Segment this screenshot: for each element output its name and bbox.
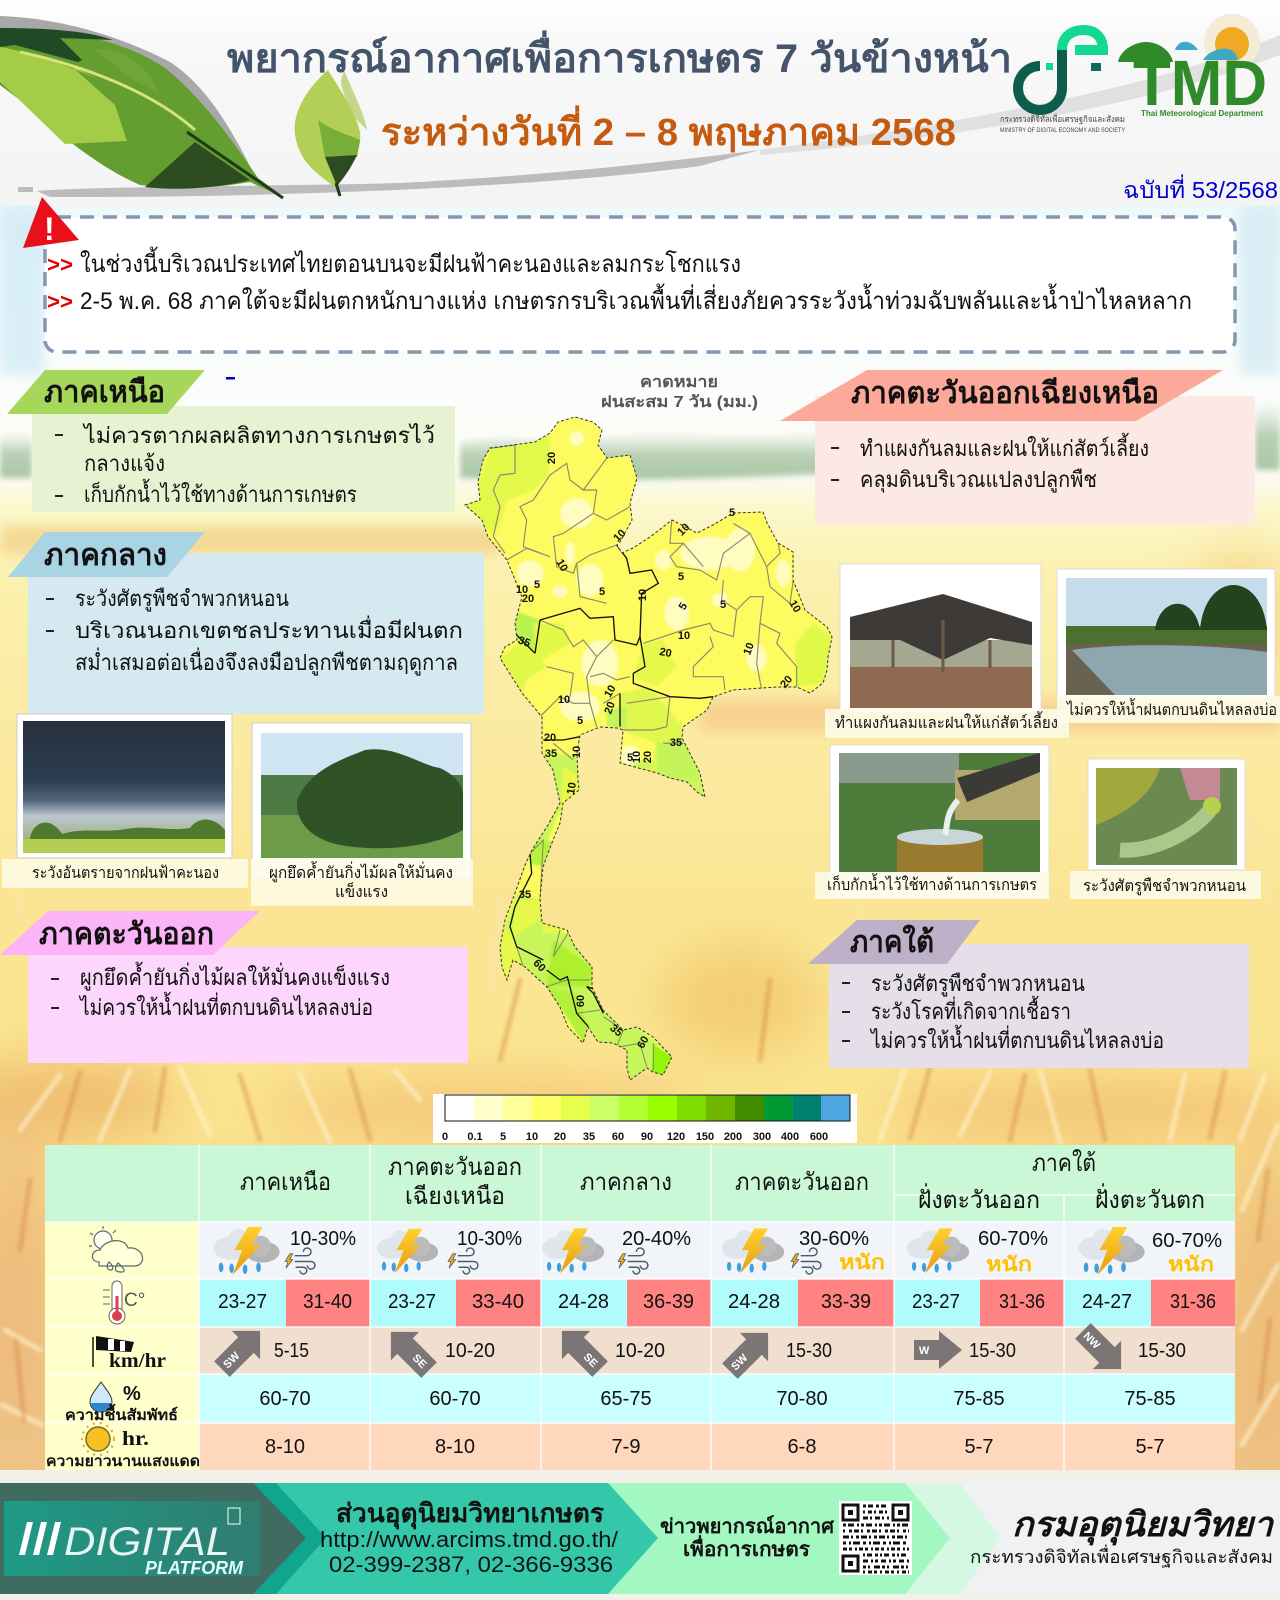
map contour labels: 60 bbox=[635, 1034, 652, 1051]
TMD name: กรมอุตุนิยมวิทยา bbox=[1012, 1506, 1275, 1546]
panel: northeast bbox=[780, 370, 1255, 525]
map contour labels bbox=[516, 452, 803, 1051]
sunshine row: 8-10 bbox=[265, 1436, 305, 1458]
colour legend: 400 bbox=[781, 1131, 799, 1143]
logo: ministry DE: กระทรวงดิจิทัลเพื่อเศรษฐกิจและสังคม bbox=[1000, 113, 1125, 125]
panel: east bbox=[0, 911, 468, 1063]
row label: relative humidity: % bbox=[123, 1383, 141, 1405]
rainfall map of Thailand bbox=[460, 410, 840, 1090]
table headers: ฝั่งตะวันออก bbox=[918, 1183, 1040, 1214]
row icon: wind sock: km/hr bbox=[109, 1350, 166, 1372]
wind row: 10-20 bbox=[615, 1340, 665, 1362]
digital platform badge bbox=[4, 1501, 260, 1578]
south advice bbox=[842, 971, 1164, 1053]
edition number: ฉบับที่ 53/2568 bbox=[1123, 174, 1278, 203]
rain and storm row: 20-40% bbox=[622, 1228, 691, 1250]
decorative region borders bbox=[515, 545, 713, 740]
temperature row: 33-39 bbox=[821, 1291, 871, 1313]
map contour labels: 5 bbox=[729, 507, 735, 519]
temperature row: 33-40 bbox=[472, 1291, 524, 1313]
alert line 1: ในช่วงนี้บริเวณประเทศไทยตอนบนจะมีฝนฟ้าคะนองและลมกระโชกแรง bbox=[80, 246, 741, 278]
map contour labels: 20 bbox=[778, 674, 795, 691]
photo: propped fruit tree bbox=[251, 723, 473, 906]
temperature row: 24-28 bbox=[728, 1291, 780, 1313]
icon: large leaf bbox=[0, 16, 285, 198]
colour legend: 0.1 bbox=[467, 1131, 483, 1143]
caption bbox=[815, 872, 1049, 899]
humidity row: 60-70 bbox=[429, 1388, 481, 1410]
sunshine row: 5-7 bbox=[1136, 1436, 1164, 1458]
forecast news label: เพื่อการเกษตร bbox=[683, 1534, 810, 1561]
colour legend: 20 bbox=[554, 1131, 566, 1143]
sunshine row: 5-7 bbox=[965, 1436, 993, 1458]
colour legend: 300 bbox=[753, 1131, 771, 1143]
east advice: ไม่ควรให้น้ำฝนที่ตกบนดินไหลลงบ่อ bbox=[78, 992, 373, 1020]
south advice: ไม่ควรให้น้ำฝนที่ตกบนดินไหลลงบ่อ bbox=[869, 1025, 1164, 1053]
map contour labels: 60 bbox=[531, 957, 548, 974]
map contour labels: 35 bbox=[607, 1022, 624, 1039]
northeast advice: คลุมดินบริเวณแปลงปลูกพืช bbox=[860, 467, 1097, 493]
map contour labels: 10 bbox=[611, 527, 628, 544]
rain and storm row: 10-30% bbox=[457, 1228, 522, 1250]
wind row: 15-30 bbox=[1138, 1340, 1186, 1362]
arrow: SW bbox=[208, 1317, 274, 1383]
caption bbox=[2, 859, 248, 888]
east advice: ผูกยึดค้ำยันกิ่งไม้ผลให้มั่นคงแข็งแรง bbox=[80, 962, 390, 991]
caption: ทำแผงกันลมและฝนให้แก่สัตว์เลี้ยง bbox=[835, 711, 1058, 732]
central advice bbox=[46, 586, 463, 676]
temperature row: 23-27 bbox=[218, 1291, 267, 1313]
photo: caterpillar bbox=[1070, 759, 1261, 899]
map legend title: คาดหมาย bbox=[640, 374, 718, 391]
table headers: ภาคเหนือ bbox=[240, 1169, 331, 1196]
temperature row: 24-27 bbox=[1082, 1291, 1132, 1313]
caption bbox=[251, 859, 473, 906]
row icon: thermometer: C° bbox=[124, 1290, 145, 1311]
central advice: สม่ำเสมอต่อเนื่องจึงลงมือปลูกพืชตามฤดูกาล bbox=[75, 647, 458, 676]
decorative wheat streaks bbox=[2, 820, 1278, 1445]
alert line 1: >> bbox=[47, 252, 73, 277]
temperature row: 36-39 bbox=[643, 1291, 694, 1313]
arrow: SW: SW bbox=[729, 1352, 751, 1373]
table headers: ภาคใต้ bbox=[1032, 1149, 1096, 1177]
decorative swoosh bbox=[760, 35, 1280, 155]
row label: relative humidity bbox=[65, 1382, 178, 1424]
division contact: ส่วนอุตุนิยมวิทยาเกษตร bbox=[336, 1498, 604, 1530]
temperature row: 31-40 bbox=[303, 1291, 352, 1313]
logo: TMD: Thai Meteorological Department bbox=[1141, 109, 1263, 118]
forecast news label bbox=[660, 1515, 835, 1561]
map contour labels: 10 bbox=[741, 641, 757, 657]
wind row: 10-20 bbox=[445, 1340, 495, 1362]
heading: south bbox=[808, 920, 980, 964]
TMD name: กระทรวงดิจิทัลเพื่อเศรษฐกิจและสังคม bbox=[970, 1544, 1273, 1568]
map contour labels: 10 bbox=[516, 584, 528, 596]
row label: sunshine duration: hr. bbox=[122, 1428, 149, 1450]
rain and storm row bbox=[213, 1227, 1222, 1276]
colour legend: 0 bbox=[442, 1131, 448, 1143]
heading: central: ภาคกลาง bbox=[44, 539, 167, 572]
map contour labels: 35 bbox=[545, 748, 557, 760]
icon: warning triangle: ! bbox=[44, 211, 55, 247]
map contour labels: 35 bbox=[516, 634, 532, 650]
rain and storm row: หนัก bbox=[986, 1254, 1032, 1276]
heading: north bbox=[7, 370, 205, 414]
map contour labels: 10 bbox=[675, 521, 692, 538]
north advice: ไม่ควรตากผลผลิตทางการเกษตรไว้ bbox=[82, 423, 435, 448]
humidity row: 60-70 bbox=[259, 1388, 311, 1410]
table headers bbox=[240, 1149, 1205, 1214]
temperature row: 23-27 bbox=[912, 1291, 960, 1313]
logo: TMD: TMD bbox=[1133, 47, 1267, 119]
table headers: ภาคตะวันออก bbox=[388, 1154, 522, 1181]
icon: small leaf bbox=[295, 70, 367, 196]
decorative table grid bbox=[45, 1145, 1235, 1470]
central advice: บริเวณนอกเขตชลประทานเมื่อมีฝนตก bbox=[75, 615, 463, 643]
logo: ministry DE: MINISTRY OF DIGITAL ECONOMY AND SOCIETY bbox=[1000, 127, 1126, 134]
map contour labels: 5 bbox=[677, 601, 690, 612]
map contour labels: 5 bbox=[534, 579, 540, 591]
arrow: SE bbox=[377, 1318, 443, 1384]
rain and storm row: 60-70% bbox=[978, 1228, 1048, 1250]
division contact: http://www.arcims.tmd.go.th/ bbox=[320, 1527, 619, 1552]
colour legend: 90 bbox=[641, 1131, 653, 1143]
colour legend: 10 bbox=[526, 1131, 538, 1143]
wind row: 15-30 bbox=[786, 1340, 832, 1362]
heading: central bbox=[8, 532, 205, 577]
heading: northeast bbox=[780, 370, 1223, 421]
map contour labels: 10 bbox=[678, 630, 690, 642]
map contour labels: 35 bbox=[519, 889, 531, 901]
table headers: ภาคตะวันออก bbox=[735, 1169, 869, 1196]
north advice: เก็บกักน้ำไว้ใช้ทางด้านการเกษตร bbox=[84, 479, 357, 507]
table headers: เฉียงเหนือ bbox=[405, 1183, 505, 1210]
caption: ระวังศัตรูพืชจำพวกหนอน bbox=[1083, 877, 1246, 896]
decorative province lines bbox=[517, 840, 653, 1070]
map contour labels: 35 bbox=[670, 737, 682, 749]
caption: ผูกยึดค้ำยันกิ่งไม้ผลให้มั่นคง bbox=[269, 861, 453, 883]
table headers: ฝั่งตะวันตก bbox=[1095, 1183, 1205, 1214]
map contour labels: 20 bbox=[602, 700, 618, 716]
rain and storm row: 60-70% bbox=[1152, 1230, 1222, 1252]
photo: livestock shelter bbox=[825, 564, 1069, 738]
map contour labels: 10 bbox=[602, 683, 619, 700]
map contour labels: 5 bbox=[678, 571, 684, 583]
northeast advice bbox=[831, 433, 1149, 493]
rain and storm row: 30-60% bbox=[799, 1228, 869, 1250]
map contour labels: 10 bbox=[631, 751, 643, 763]
row icon: thermometer bbox=[103, 1281, 145, 1324]
forecast table bbox=[45, 1145, 1235, 1470]
wind row bbox=[208, 1317, 1186, 1385]
row label: sunshine duration bbox=[46, 1423, 200, 1470]
row icon: weather bbox=[89, 1226, 143, 1272]
humidity row bbox=[259, 1388, 1176, 1410]
temperature row bbox=[218, 1291, 1216, 1313]
colour legend: 35 bbox=[583, 1131, 595, 1143]
panel: north bbox=[7, 370, 455, 512]
row icon: wind sock bbox=[93, 1336, 166, 1372]
footer band bbox=[0, 1470, 1280, 1600]
arrow: SE: SE bbox=[410, 1352, 429, 1371]
title: พยากรณ์อากาศเพื่อการเกษตร 7 วันข้างหน้า bbox=[227, 30, 1012, 81]
north advice: กลางแจ้ง bbox=[84, 451, 165, 476]
heading: east: ภาคตะวันออก bbox=[39, 918, 214, 951]
map contour labels: 10 bbox=[565, 781, 579, 796]
division contact bbox=[320, 1498, 619, 1577]
row label: relative humidity: ความชื้นสัมพัทธ์ bbox=[65, 1403, 178, 1424]
map contour labels: 20 bbox=[642, 751, 654, 763]
temperature row: 31-36 bbox=[1170, 1291, 1216, 1313]
caption: ระวังอันตรายจากฝนฟ้าคะนอง bbox=[32, 864, 219, 882]
map contour labels: 10 bbox=[553, 557, 570, 574]
wind row: 15-30 bbox=[969, 1340, 1016, 1362]
map contour labels: 20 bbox=[522, 593, 534, 605]
map contour labels: 20 bbox=[546, 452, 558, 464]
arrow: NW: NW bbox=[1081, 1330, 1103, 1352]
map legend title: ฝนสะสม 7 วัน (มม.) bbox=[601, 393, 758, 411]
TMD name bbox=[970, 1506, 1275, 1568]
map contour labels: 5 bbox=[577, 715, 583, 727]
stray blue dash bbox=[226, 377, 235, 380]
rain and storm row: 10-30% bbox=[290, 1228, 356, 1250]
photo: rain water barrel bbox=[815, 745, 1049, 899]
arrow: NW bbox=[1069, 1317, 1135, 1383]
digital platform badge: PLATFORM bbox=[145, 1558, 244, 1578]
south advice: ระวังศัตรูพืชจำพวกหนอน bbox=[871, 971, 1085, 997]
temperature row: 24-28 bbox=[558, 1291, 609, 1313]
caption bbox=[1057, 696, 1280, 723]
table cell backgrounds bbox=[45, 1145, 1235, 1470]
photo: storm clouds bbox=[2, 714, 248, 888]
forecast news label: ข่าวพยากรณ์อากาศ bbox=[660, 1515, 835, 1538]
map contour labels: 10 bbox=[637, 589, 649, 601]
south advice: ระวังโรคที่เกิดจากเชื้อรา bbox=[871, 996, 1071, 1024]
division contact: 02-399-2387, 02-366-9336 bbox=[329, 1552, 613, 1577]
map contour labels: 5 bbox=[627, 752, 633, 764]
heading: east bbox=[0, 911, 260, 955]
temperature row: 31-36 bbox=[999, 1291, 1045, 1313]
map contour labels: 5 bbox=[599, 586, 605, 598]
logo: TMD bbox=[1118, 14, 1267, 119]
rain and storm row: หนัก bbox=[839, 1252, 885, 1274]
humidity row: 75-85 bbox=[1124, 1388, 1176, 1410]
panel: central bbox=[8, 532, 484, 714]
map contour labels: 10 bbox=[786, 598, 803, 615]
map legend title bbox=[601, 374, 758, 411]
sunshine row: 6-8 bbox=[788, 1436, 816, 1458]
date subtitle: ระหว่างวันที่ 2 – 8 พฤษภาคม 2568 bbox=[381, 105, 956, 154]
alert line 2: >> bbox=[47, 289, 73, 314]
map contour labels: 20 bbox=[544, 732, 556, 744]
arrow: SW: SW bbox=[221, 1350, 243, 1371]
alert line 2: 2-5 พ.ค. 68 ภาคใต้จะมีฝนตกหนักบางแห่ง เกษตรกรบริเวณพื้นที่เสี่ยงภัยควรระวังน้ำท่วมฉับพลันและน้ำป่าไหลหลาก bbox=[80, 283, 1192, 315]
arrow: W: W bbox=[919, 1345, 930, 1357]
decorative province lines bbox=[490, 445, 797, 760]
map contour labels: 10 bbox=[571, 746, 583, 758]
caption: แข็งแรง bbox=[335, 881, 388, 901]
panel: south bbox=[808, 920, 1249, 1068]
central advice: ระวังศัตรูพืชจำพวกหนอน bbox=[75, 586, 289, 612]
arrow: SW bbox=[716, 1319, 782, 1385]
colour legend: 200 bbox=[724, 1131, 742, 1143]
decorative region borders bbox=[510, 853, 603, 1027]
wind row: 5-15 bbox=[274, 1340, 309, 1362]
sunshine row: 7-9 bbox=[612, 1436, 640, 1458]
arrow: SE bbox=[548, 1317, 614, 1383]
caption: เก็บกักน้ำไว้ใช้ทางด้านการเกษตร bbox=[827, 873, 1037, 894]
colour legend: 60 bbox=[612, 1131, 624, 1143]
rain and storm row: หนัก bbox=[1168, 1254, 1214, 1276]
digital platform badge: DIGITAL bbox=[64, 1520, 230, 1564]
heading: north: ภาคเหนือ bbox=[44, 376, 165, 409]
humidity row: 70-80 bbox=[776, 1388, 828, 1410]
colour legend: 120 bbox=[667, 1131, 685, 1143]
colour legend: 600 bbox=[810, 1131, 828, 1143]
map contour labels: 5 bbox=[720, 599, 726, 611]
sunshine row: 8-10 bbox=[435, 1436, 475, 1458]
map contour labels: 10 bbox=[558, 694, 570, 706]
caption bbox=[1070, 871, 1261, 899]
arrow: SE: SE bbox=[581, 1351, 600, 1370]
heading: northeast: ภาคตะวันออกเฉียงเหนือ bbox=[851, 377, 1159, 410]
icon: warning triangle bbox=[23, 197, 79, 248]
humidity row: 65-75 bbox=[600, 1388, 652, 1410]
map contour labels: 60 bbox=[575, 995, 587, 1007]
header banner bbox=[0, 0, 1280, 205]
east advice bbox=[51, 962, 390, 1020]
humidity row: 75-85 bbox=[953, 1388, 1005, 1410]
northeast advice: ทำแผงกันลมและฝนให้แก่สัตว์เลี้ยง bbox=[860, 433, 1149, 461]
colour legend bbox=[433, 1094, 857, 1143]
arrow: W bbox=[914, 1331, 962, 1369]
colour legend: 5 bbox=[500, 1131, 506, 1143]
row label: sunshine duration: ความยาวนานแสงแดด bbox=[46, 1453, 200, 1470]
caption bbox=[825, 709, 1069, 738]
map contour labels: 20 bbox=[658, 646, 673, 660]
heading: south: ภาคใต้ bbox=[850, 924, 934, 959]
temperature row: 23-27 bbox=[388, 1291, 436, 1313]
logo: ministry DE bbox=[1000, 30, 1126, 134]
table headers: ภาคกลาง bbox=[580, 1169, 672, 1196]
colour legend: 150 bbox=[696, 1131, 714, 1143]
sunshine row bbox=[265, 1436, 1164, 1458]
north advice bbox=[55, 423, 435, 507]
photo: pond bbox=[1057, 569, 1280, 723]
QR code bbox=[839, 1501, 912, 1575]
alert box bbox=[45, 217, 1235, 352]
